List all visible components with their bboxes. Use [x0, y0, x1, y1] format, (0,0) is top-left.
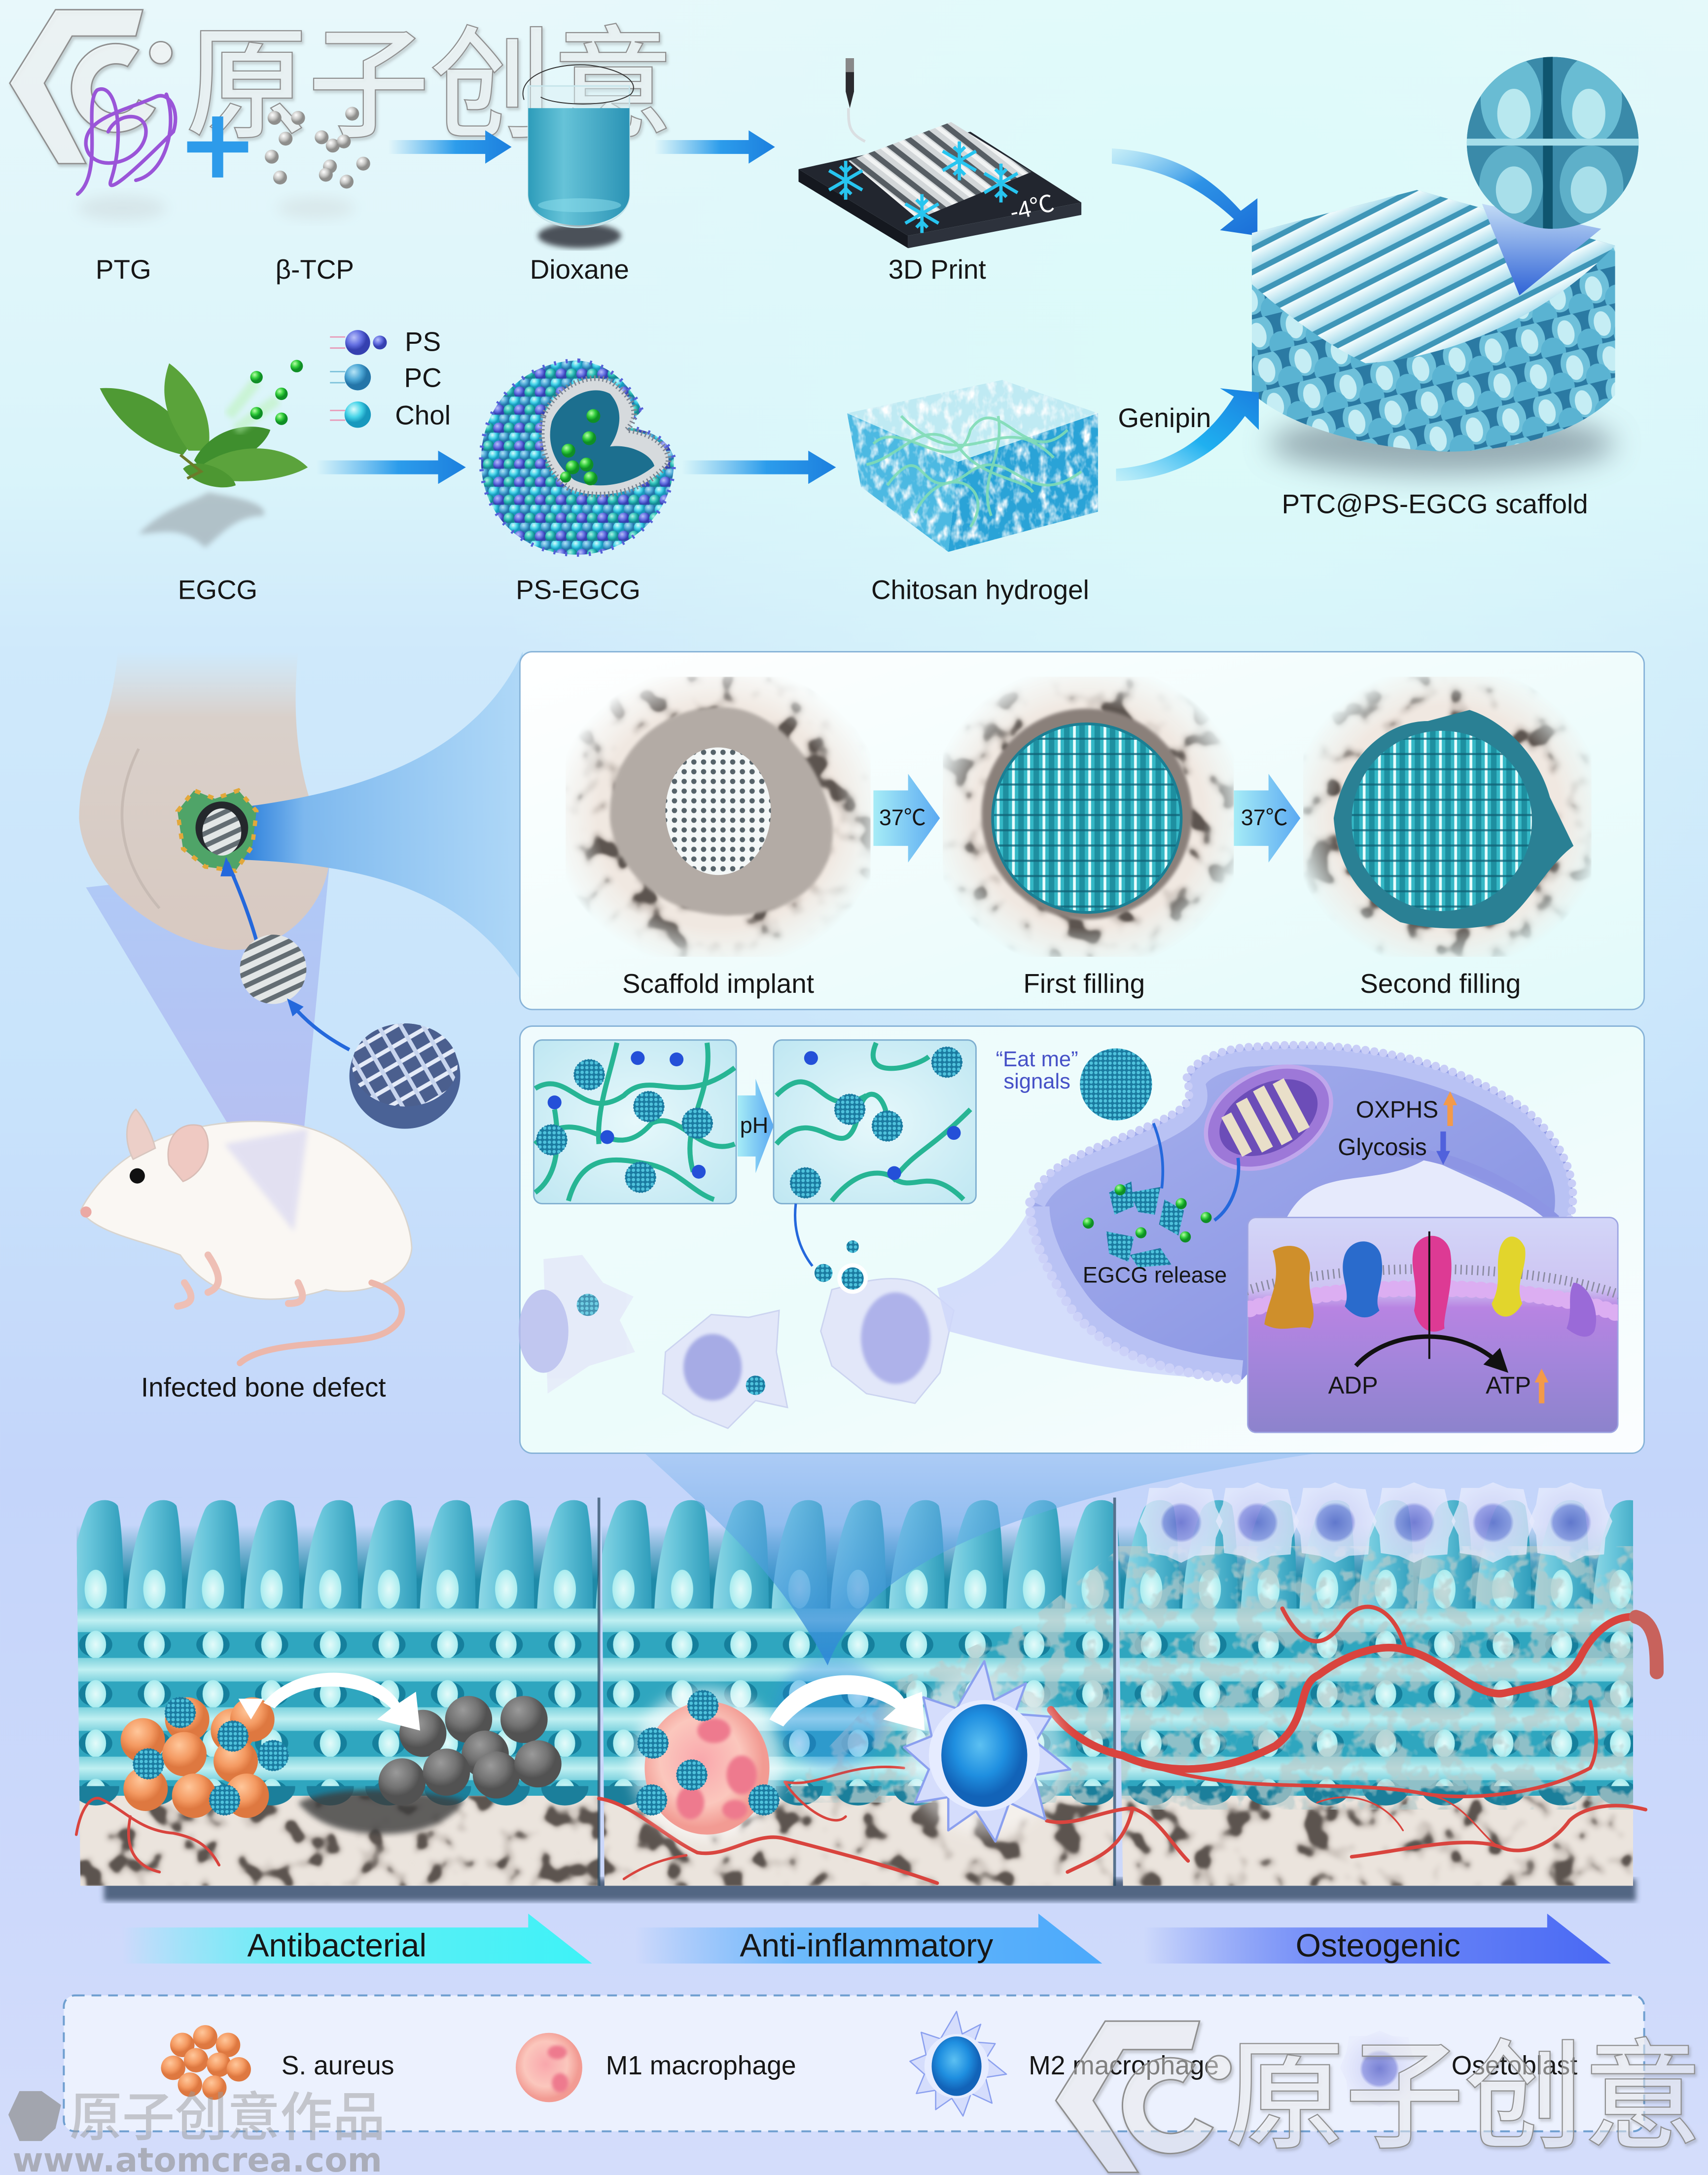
scaffold block — [76, 1498, 1636, 1901]
label: Scaffold implant: Scaffold implant — [622, 968, 814, 999]
label: EGCG: EGCG — [178, 575, 257, 605]
icon: EGCG molecules — [250, 360, 303, 425]
banner: Osteogenic: Osteogenic — [1296, 1927, 1460, 1964]
label: PTC@PS-EGCG scaffold: PTC@PS-EGCG scaffold — [1281, 488, 1588, 519]
funnel: femur to rat — [86, 860, 330, 1234]
legend label: S. aureus: S. aureus — [282, 2051, 394, 2080]
label: Chitosan hydrogel: Chitosan hydrogel — [871, 575, 1089, 605]
hydrogel square: after pH — [774, 1040, 976, 1203]
icon: Glycosis down arrow — [1436, 1131, 1450, 1165]
blue-grey scaffold — [350, 1023, 461, 1129]
label: 3D Print: 3D Print — [889, 254, 986, 285]
protein: pink — [1413, 1236, 1452, 1332]
legend icon: M1 macrophage — [516, 2033, 582, 2102]
arrow: to mitochondrion — [1214, 1158, 1239, 1220]
M2 macrophage — [904, 1661, 1070, 1842]
banner: Antibacterial — [122, 1914, 592, 1964]
label: Infected bone defect: Infected bone defect — [141, 1372, 386, 1402]
arrow: implant to defect — [227, 863, 258, 946]
rat — [80, 1109, 412, 1363]
icon: beta-TCP particles — [265, 107, 370, 219]
icon: plus — [187, 116, 248, 178]
macrophage left — [519, 1255, 635, 1394]
bone tile: first filling — [943, 677, 1234, 957]
arrow: second 37C — [1234, 774, 1300, 863]
icon: dioxane vial — [523, 65, 634, 248]
arrow: pH: pH — [740, 1113, 768, 1138]
label: PTG: PTG — [96, 254, 151, 285]
legend label: Chol: Chol — [395, 399, 451, 430]
macrophage middle — [663, 1310, 787, 1428]
arrow: hydrogel to scaffold — [1116, 388, 1259, 481]
legend icon: PS — [330, 330, 387, 355]
arrow: uptake — [1153, 1123, 1163, 1189]
label: beta-TCP: β-TCP — [276, 254, 354, 285]
arrow: pH — [738, 1079, 774, 1173]
label: PS-EGCG: PS-EGCG — [516, 575, 640, 605]
watermark: bottom-right wordmark: 原子创意 — [1226, 2000, 1703, 2173]
legend icon: PC — [330, 364, 371, 390]
legend icon: Chol — [330, 401, 371, 428]
legend icon: osteoblast — [1340, 2030, 1419, 2107]
arrow: first 37C: 37℃ — [879, 805, 926, 830]
label: eat me signals: “Eat me” — [996, 1048, 1078, 1071]
arrow: anti-inflammatory — [769, 1657, 925, 1768]
funnel: panel to block — [644, 1453, 1317, 1666]
watermark: top-left logo — [10, 10, 172, 164]
arrow: to hydrogel — [682, 451, 836, 484]
osteoblasts row — [1139, 1483, 1612, 1563]
arrow: ADP to ATP — [1356, 1337, 1508, 1373]
inset: ATP synthesis — [1241, 1218, 1625, 1432]
dead bacteria cluster — [379, 1696, 562, 1806]
label: OXPHS: OXPHS — [1356, 1097, 1438, 1123]
chitosan hydrogel cube — [847, 380, 1098, 552]
arrow: scaffold to implant — [291, 1004, 350, 1050]
arrow: antibacterial — [239, 1672, 420, 1731]
icon: arrow head — [287, 998, 304, 1016]
funnel: femur to panel — [243, 652, 523, 983]
protein: yellow — [1492, 1236, 1526, 1317]
label: Dioxane: Dioxane — [530, 254, 629, 285]
funnel: cell to membrane — [937, 1196, 1242, 1378]
scaffold disk — [1252, 190, 1615, 474]
banner: Antibacterial: Antibacterial — [247, 1927, 427, 1964]
arrow: second 37C: 37℃ — [1241, 805, 1288, 830]
M1 macrophage — [631, 1688, 783, 1840]
arrow: to dioxane — [388, 130, 512, 164]
protein: violet — [1566, 1283, 1596, 1337]
icon: OXPHS up arrow — [1443, 1091, 1457, 1126]
arrow: print to scaffold — [1112, 148, 1257, 236]
panel: legend — [64, 1995, 1644, 2131]
legend label: M1 macrophage: M1 macrophage — [606, 2051, 796, 2080]
large cell membrane — [1030, 1045, 1573, 1380]
blood vessels — [76, 1607, 1657, 1883]
icon: 3D printing stage: -4℃ — [1007, 190, 1057, 226]
watermark: bottom-left wordmark: 原子创意作品 — [70, 2074, 386, 2151]
legend icon: M2 macrophage — [910, 2011, 1006, 2116]
banner: Anti-inflammatory — [635, 1914, 1102, 1964]
arrow: first 37C — [873, 774, 940, 863]
magnified scaffold circle — [1467, 55, 1640, 236]
icon: 3D printing stage — [799, 58, 1081, 248]
label: ATP: ATP — [1486, 1372, 1531, 1399]
line: membrane axis — [1429, 1232, 1430, 1359]
banner: Anti-inflammatory: Anti-inflammatory — [740, 1927, 993, 1964]
mitochondrion — [1188, 1046, 1349, 1189]
label: eat me signals: signals — [1003, 1070, 1070, 1093]
icon: arrow head — [220, 857, 236, 876]
defect site — [178, 791, 256, 871]
arrow: particle to cell — [795, 1203, 813, 1266]
watermark: bottom-right logo — [1056, 2021, 1231, 2173]
arrow: to PS-EGCG — [316, 451, 466, 484]
icon: PTG polymer — [78, 89, 176, 220]
liposome PS-EGCG — [479, 358, 676, 557]
label: First filling: First filling — [1023, 968, 1145, 999]
legend label: osteoblast: Osetoblast — [1452, 2051, 1577, 2080]
panel: mechanism — [519, 1026, 1644, 1453]
bone tile: scaffold implant — [566, 677, 871, 957]
arrow: to 3D print — [654, 130, 775, 164]
label: EGCG release: EGCG release — [1083, 1263, 1227, 1288]
label: ADP: ADP — [1328, 1372, 1378, 1399]
label: Second filling: Second filling — [1360, 968, 1521, 999]
protein: orange — [1264, 1246, 1314, 1329]
nanoparticle: eat me — [1080, 1049, 1152, 1121]
icon: EGCG leaf — [100, 363, 308, 548]
femur bone — [79, 652, 330, 950]
released fragments and EGCG — [1083, 1181, 1211, 1268]
legend label: M2 macrophage: M2 macrophage — [1029, 2051, 1219, 2080]
small grey scaffold — [240, 935, 306, 1004]
bacteria cluster: S. aureus — [121, 1697, 288, 1818]
macrophage right — [815, 1240, 954, 1403]
bone tile: second filling — [1303, 677, 1592, 957]
legend label: PC: PC — [404, 362, 442, 393]
hydrogel square: before pH — [534, 1040, 736, 1203]
legend label: PS: PS — [405, 326, 441, 357]
panel: filling stages — [520, 652, 1644, 1010]
protein: blue — [1343, 1241, 1382, 1317]
label: Genipin: Genipin — [1118, 402, 1211, 433]
zoom pointer — [1482, 204, 1601, 295]
legend icon: S. aureus — [161, 2025, 251, 2100]
icon: ATP up arrow — [1534, 1369, 1549, 1403]
label: Glycosis: Glycosis — [1338, 1134, 1427, 1160]
banner: Osteogenic — [1144, 1914, 1611, 1964]
label: eat me signals — [996, 1048, 1078, 1093]
